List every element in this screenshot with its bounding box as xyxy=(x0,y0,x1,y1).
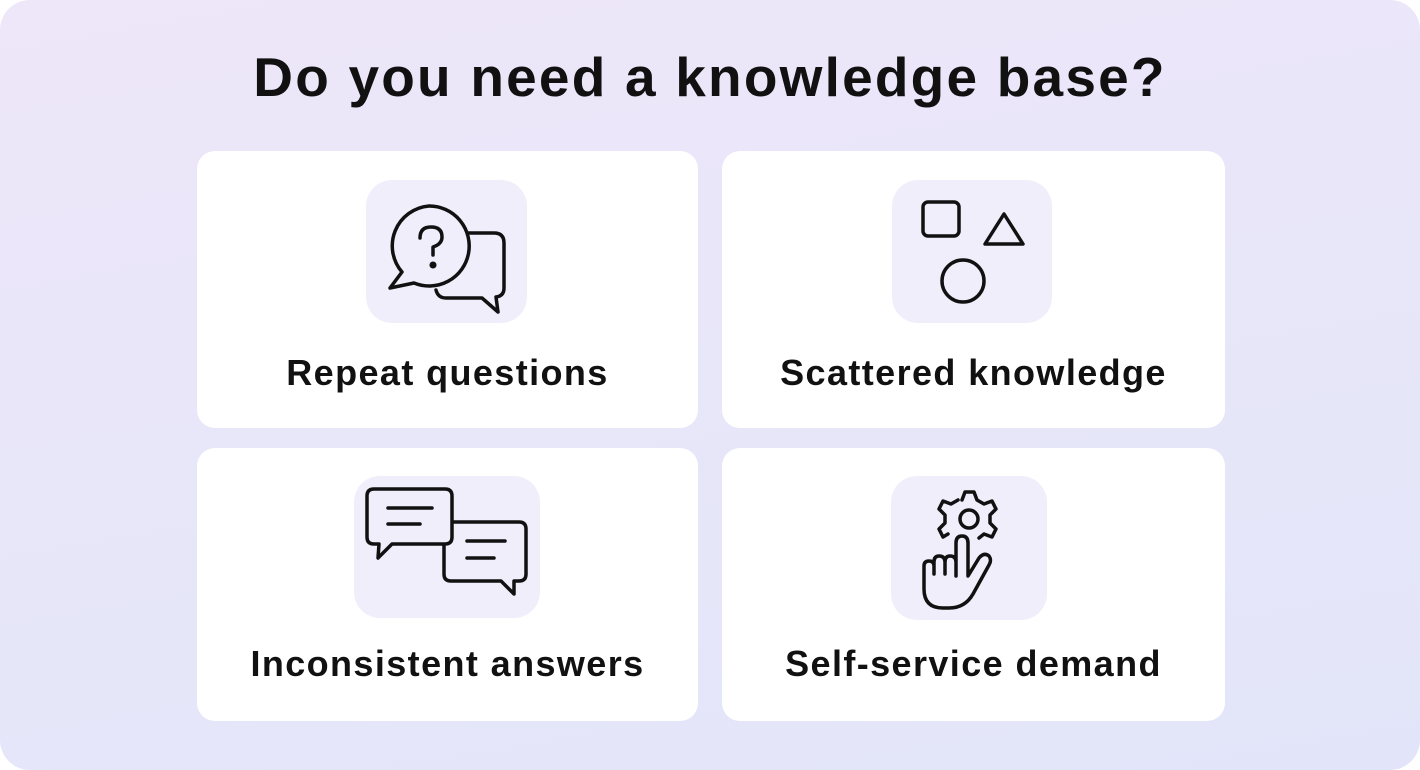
icon: shapes xyxy=(892,180,1052,323)
icon: question speech bubbles xyxy=(366,180,527,323)
panel: scattered knowledge xyxy=(722,151,1225,428)
label: Repeat questions xyxy=(286,352,609,393)
title: Do you need a knowledge base? xyxy=(253,46,1167,108)
label: Inconsistent answers xyxy=(250,643,645,684)
panel: inconsistent answers xyxy=(197,448,698,721)
panel: repeat questions xyxy=(197,151,698,428)
icon: chat bubbles xyxy=(354,476,540,618)
icon: hand with gear xyxy=(891,476,1047,620)
panel: self-service demand xyxy=(722,448,1225,721)
label: Self-service demand xyxy=(785,643,1162,684)
label: Scattered knowledge xyxy=(780,352,1167,393)
